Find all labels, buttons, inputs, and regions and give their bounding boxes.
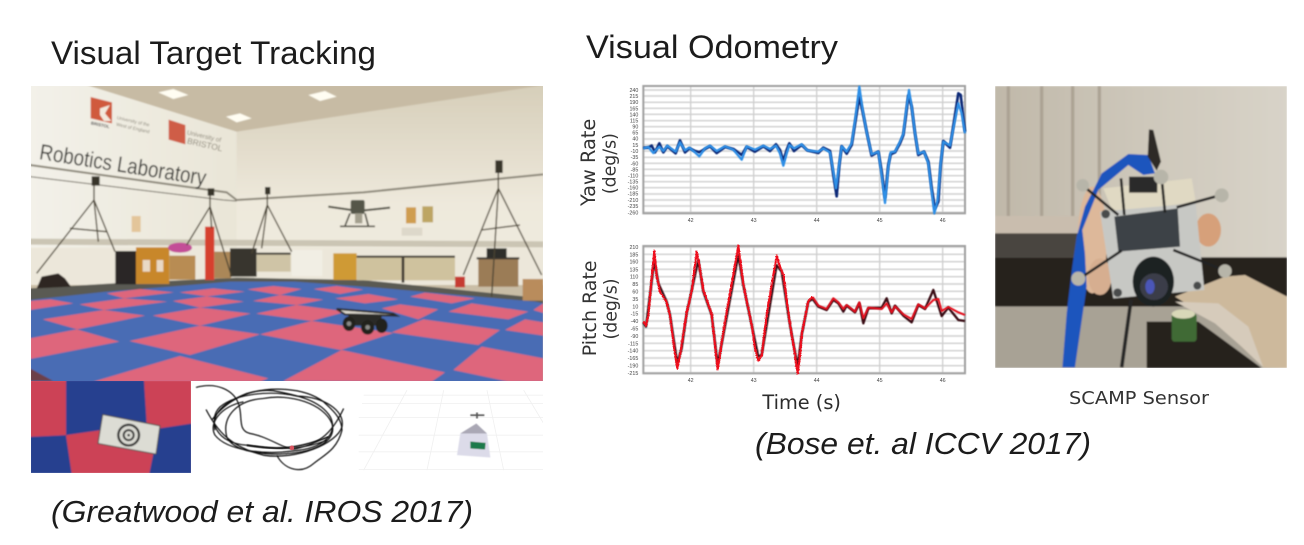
heading: Visual Target Tracking: Visual Target Tracking (51, 35, 376, 71)
sub-element: time axis label: Time (s) (761, 391, 841, 414)
photo: robotics laboratory with drone and ground robot (31, 86, 543, 381)
citation: Bose et al ICCV 2017: (Bose et. al ICCV 2017) (755, 426, 1091, 461)
sub-element: cabinets and benches (37, 227, 543, 301)
sub-element: sensor body (1100, 177, 1204, 298)
sub-element: pitch tick labels: 60 (632, 289, 638, 295)
sub-element: yaw tick labels: 190 (629, 100, 638, 106)
sub-element: green mug (1172, 309, 1197, 342)
sub-element: yaw tick labels: 165 (629, 106, 638, 112)
sub-element: yaw axis label: (deg/s) (600, 133, 620, 194)
sub-element: arm and hand (1078, 187, 1287, 368)
sub-element: yaw tick labels: 15 (632, 143, 638, 149)
sub-element: University of Bristol logo: University of (186, 129, 222, 144)
photo: SCAMP sensor with markers held in hand (995, 86, 1287, 368)
sub-element: yaw axis label: Yaw Rate (577, 119, 600, 207)
sub-element: University of Bristol logo: BRISTOL (186, 136, 224, 153)
sub-element: pitch tick labels: 44 (814, 378, 820, 384)
sub-element: pitch tick labels: 210 (629, 245, 638, 251)
sub-element: black cable (1122, 129, 1161, 367)
sub-element: pitch gridlines and frame (643, 246, 965, 373)
sub-element: blue lanyard (1062, 154, 1155, 367)
sub-element: yaw tick labels: 43 (751, 218, 757, 224)
sub-element: University of the West of England logo (90, 97, 151, 134)
sub-element: yaw tick labels: -160 (628, 186, 638, 192)
strip: overhead view of landing target on mat (31, 381, 191, 473)
chart: pitch rate over time (579, 244, 966, 414)
sub-element: pitch tick labels: -140 (628, 349, 638, 355)
sub-element: yaw tick labels: -85 (631, 167, 638, 173)
sub-element: simulated marker block (457, 424, 490, 458)
sub-element: pitch estimated red trace, settled section (813, 297, 965, 319)
sub-element: pitch axis label: Pitch Rate (579, 260, 601, 356)
sub-element: camera lens (1133, 257, 1174, 307)
sub-element: drone (328, 200, 390, 226)
strip: 3D simulation with drone above marker (358, 390, 543, 470)
sub-element: pitch tick labels: -190 (628, 364, 638, 370)
sub-element: pitch tick labels: -165 (628, 356, 638, 362)
sub-element: yaw tick labels: 46 (940, 218, 946, 224)
sub-element: pitch tick labels: 42 (688, 378, 694, 384)
sub-element: red floor tiles (30, 286, 543, 382)
sub-element: floor mat base (30, 282, 543, 385)
sub-element: yaw tick labels: -60 (631, 161, 638, 167)
sub-element: yaw tick labels: -235 (628, 204, 638, 210)
heading: Visual Odometry: Visual Odometry (586, 29, 838, 65)
sub-element: pitch tick labels: -40 (631, 319, 638, 325)
sub-element: pitch tick labels: 35 (632, 297, 638, 303)
sub-element: pitch tick labels (628, 245, 946, 384)
sub-element: yaw tick labels: -185 (628, 192, 638, 198)
sub-element: motion capture tripods (37, 160, 542, 297)
sub-element: pitch tick labels: 185 (629, 252, 638, 258)
strip: flight trajectory plot (195, 384, 345, 472)
citation: Greatwood et al. IROS 2017: (Greatwood et al. IROS 2017) (51, 494, 473, 529)
sub-element: pitch axis label (579, 260, 622, 356)
sub-element: yaw axis label (577, 119, 620, 207)
sub-element: yaw tick labels: 45 (877, 218, 883, 224)
sub-element: marker rods and spheres (1071, 170, 1232, 286)
sub-element: University of the West of England logo: University of the (116, 115, 150, 128)
sub-element: yaw tick labels: 215 (629, 94, 638, 100)
sub-element: pitch tick labels: -15 (631, 312, 638, 318)
sub-element: yaw gridlines and frame (643, 86, 965, 213)
sub-element: yaw tick labels: -10 (631, 149, 638, 155)
sub-element: pitch tick labels: 110 (630, 275, 638, 281)
sub-element: pitch measured dark trace (643, 255, 965, 367)
sub-element: yaw tick labels (628, 88, 946, 224)
sub-element: ground robot with target (337, 309, 397, 335)
sub-element: yaw tick labels: -110 (628, 173, 638, 179)
sub-element: yaw tick labels: -260 (628, 210, 638, 216)
sub-element: yaw tick labels: 40 (632, 137, 638, 143)
sub-element: yaw tick labels: 240 (629, 88, 638, 94)
sub-element: pitch tick labels: 46 (940, 378, 946, 384)
sub-element: concentric target board (98, 414, 160, 454)
sub-element: pitch tick labels: -90 (631, 334, 638, 340)
sub-element: yaw tick labels: 115 (630, 118, 638, 124)
sub-element: simulated drone (470, 412, 484, 418)
chart: yaw rate over time (577, 84, 967, 224)
sub-element: yaw tick labels: 140 (629, 112, 638, 118)
sub-element: yaw measured dark trace (643, 93, 965, 208)
sub-element: yaw tick labels: -210 (628, 198, 638, 204)
sub-element: yaw tick labels: -35 (631, 155, 638, 161)
sub-element: pitch tick labels: 85 (632, 282, 638, 288)
sub-element: pitch tick labels: -115 (628, 341, 638, 347)
sub-element: pitch tick labels: -215 (628, 371, 638, 377)
sub-element: pitch tick labels: 10 (632, 304, 638, 310)
sub-element: yaw tick labels: -135 (628, 180, 638, 186)
sub-element: pitch tick labels: -65 (631, 326, 638, 332)
sub-element: pitch tick labels: 43 (751, 378, 757, 384)
sub-element: yaw tick labels: 90 (632, 125, 638, 131)
sub-element: Robotics Laboratory wall sign: Robotics Laboratory (38, 139, 208, 190)
sub-element: pitch tick labels: 135 (629, 267, 638, 273)
sub-element: yaw estimated light trace (643, 87, 965, 213)
sub-element: pitch tick labels: 45 (877, 378, 883, 384)
sub-element: pitch estimated red trace, rising and falling swings (643, 246, 813, 373)
sub-element: yaw tick labels: 42 (688, 218, 694, 224)
sub-element: pitch tick labels: 160 (629, 260, 638, 266)
caption: SCAMP Sensor: SCAMP Sensor (1069, 388, 1210, 409)
sub-element: University of the West of England logo: BRISTOL (90, 120, 110, 129)
sub-element: University of Bristol logo (169, 120, 224, 153)
sub-element: University of the West of England logo: West of England (116, 122, 151, 134)
sub-element: yaw tick labels: 44 (814, 218, 820, 224)
sub-element: pitch axis label: (deg/s) (602, 278, 622, 340)
sub-element: yaw tick labels: 65 (632, 131, 638, 137)
sub-element: wall posters (132, 206, 433, 236)
